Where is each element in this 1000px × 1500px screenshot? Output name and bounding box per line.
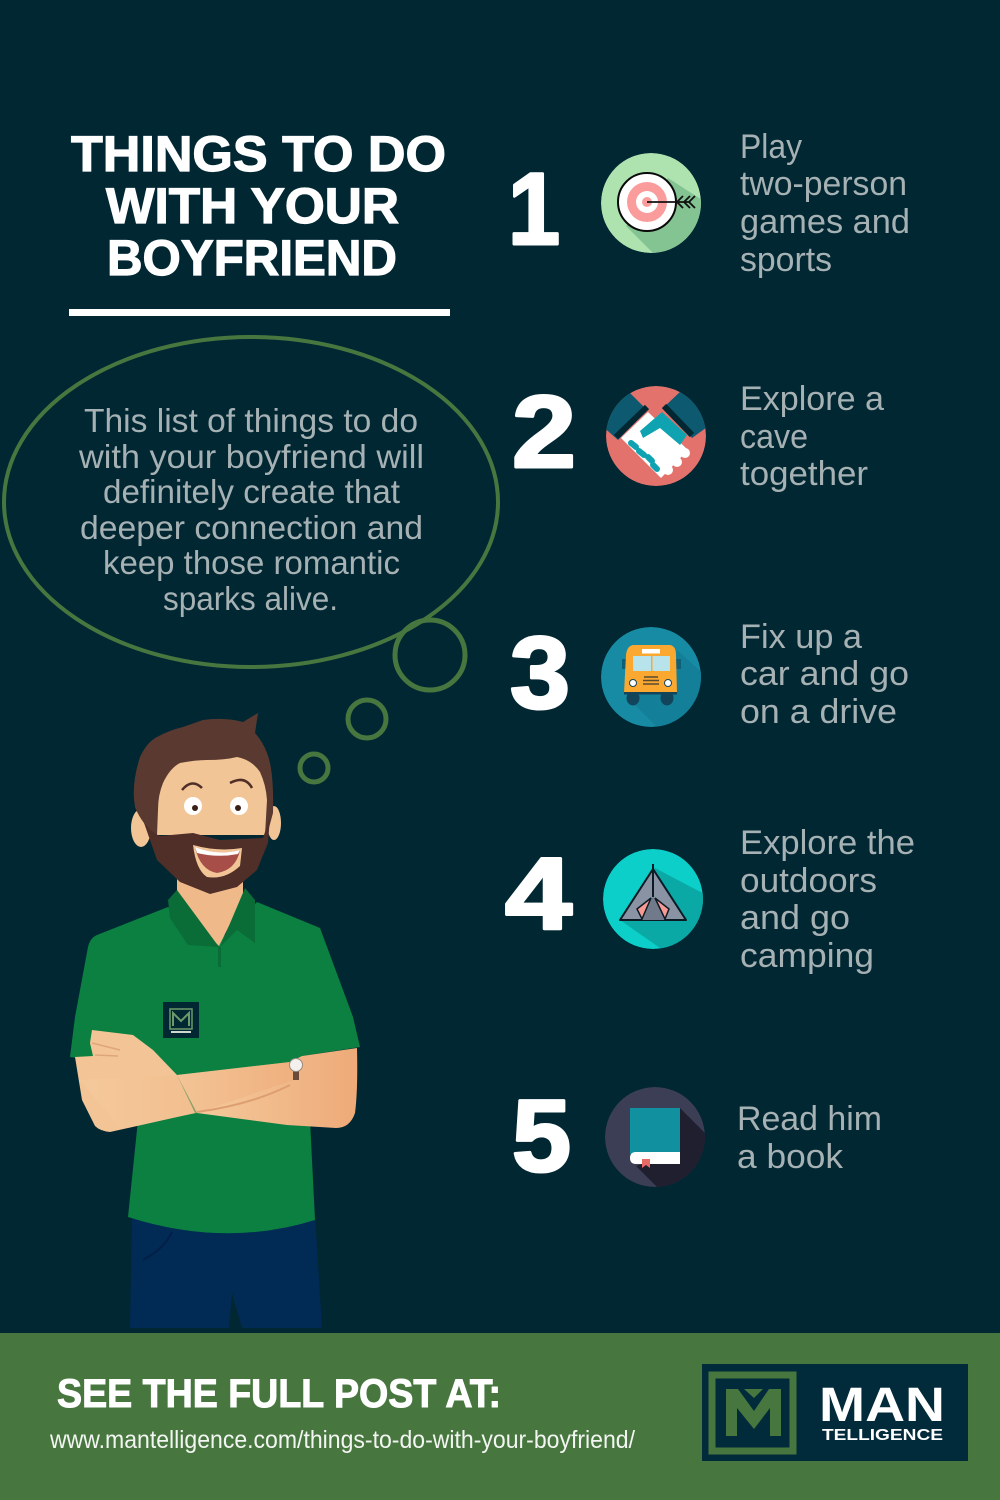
label 4: Explore the — [740, 824, 915, 862]
label 5: Read him — [737, 1100, 882, 1138]
label 2: cave — [740, 418, 808, 456]
number 2: 2 — [512, 375, 576, 489]
title: WITH YOUR — [106, 178, 399, 234]
label 5: a book — [737, 1138, 844, 1176]
intro paragraph: keep those romantic — [103, 544, 400, 581]
number 4: 4 — [505, 837, 572, 951]
collar — [168, 888, 255, 967]
left forearm and hand — [75, 1030, 195, 1132]
item 2 — [512, 375, 884, 493]
intro paragraph: deeper connection and — [80, 509, 423, 546]
icon: book — [605, 1087, 705, 1187]
intro paragraph: with your boyfriend will — [78, 438, 424, 475]
wristwatch — [290, 1058, 302, 1080]
label 2 — [740, 380, 884, 493]
eyes — [182, 780, 252, 815]
icon: handshake — [600, 386, 710, 486]
label 4: camping — [740, 937, 874, 975]
shirt badge — [163, 1002, 199, 1038]
intro paragraph: definitely create that — [103, 473, 400, 510]
label 1 — [740, 128, 910, 279]
label 1: games and — [740, 203, 910, 241]
label 1: Play — [740, 128, 802, 166]
label 1: sports — [740, 241, 832, 279]
trousers — [130, 1215, 322, 1328]
hair — [134, 713, 273, 835]
item 4 — [505, 824, 915, 975]
mouth — [193, 845, 242, 878]
title: BOYFRIEND — [107, 230, 397, 286]
item 5 — [514, 1087, 880, 1187]
neck — [177, 878, 243, 946]
item 1 — [508, 128, 910, 279]
footer url: www.mantelligence.com/things-to-do-with-your-boyfriend/ — [49, 1426, 635, 1454]
label 3: car and go — [740, 655, 909, 693]
right forearm — [177, 1048, 357, 1128]
intro paragraph: sparks alive. — [163, 580, 338, 617]
label 3: on a drive — [740, 693, 897, 731]
intro paragraph: This list of things to do — [84, 402, 418, 439]
label 1: two-person — [740, 165, 907, 203]
icon: target with arrow — [601, 153, 701, 253]
logo — [702, 1364, 968, 1461]
number 5: 5 — [512, 1079, 571, 1193]
logo: TELLIGENCE — [822, 1427, 943, 1444]
ears — [131, 806, 281, 847]
label 5 — [737, 1100, 882, 1176]
label 3: Fix up a — [740, 618, 862, 656]
number 1: 1 — [508, 152, 560, 266]
label 2: Explore a — [740, 380, 884, 418]
beard — [143, 817, 270, 894]
title: THINGS TO DO — [71, 126, 446, 182]
logo: MAN — [819, 1379, 945, 1432]
label 4: and go — [740, 899, 850, 937]
footer band — [0, 1333, 1000, 1500]
label 2: together — [740, 455, 868, 493]
label 4 — [740, 824, 915, 975]
shirt — [70, 902, 360, 1233]
icon: school bus — [601, 627, 701, 727]
character: man with crossed arms — [70, 713, 360, 1328]
number 3: 3 — [510, 616, 570, 730]
face — [157, 757, 267, 835]
title — [71, 126, 446, 286]
label 3 — [740, 618, 909, 731]
item 3 — [510, 623, 908, 727]
thought bubble — [4, 337, 498, 782]
intro paragraph — [78, 402, 424, 617]
icon: tent — [603, 849, 703, 949]
label 4: outdoors — [740, 862, 877, 900]
footer heading: SEE THE FULL POST AT: — [57, 1372, 501, 1416]
